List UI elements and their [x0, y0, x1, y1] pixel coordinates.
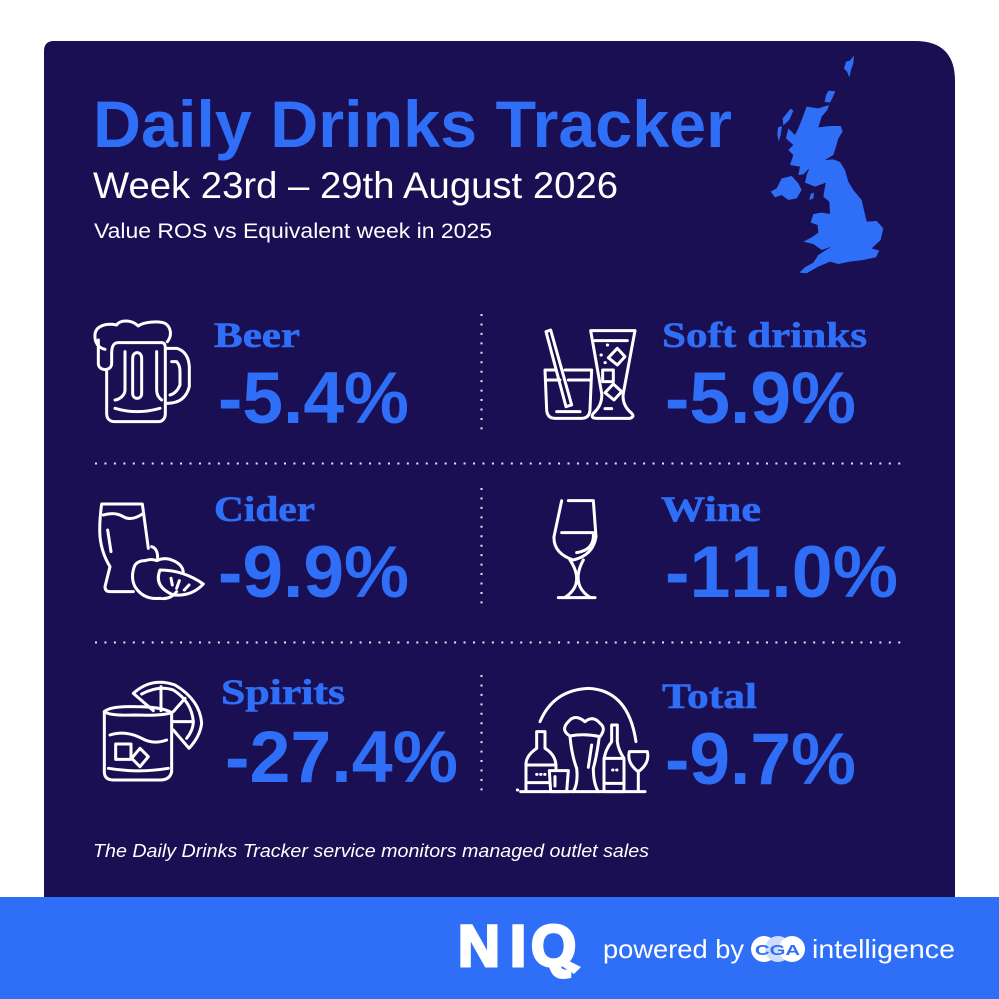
panel: cider [100, 489, 409, 613]
intelligence: intelligence [812, 934, 955, 964]
logo: NIQ [458, 914, 581, 979]
panel: soft drinks [545, 315, 867, 439]
metric description: Value ROS vs Equivalent week in 2025 [94, 220, 492, 243]
label: wine: Wine [661, 489, 761, 529]
divider: vertical row 1 [480, 314, 482, 434]
icon: wine glass [554, 501, 596, 598]
UK map [771, 55, 883, 273]
value: wine: -11.0% [665, 532, 898, 613]
panel: beer [95, 315, 409, 439]
logo: NIQ: I [510, 914, 526, 979]
logo: CGA: CGA [755, 942, 800, 959]
logo: CGA [751, 936, 805, 962]
label: cider: Cider [214, 489, 315, 529]
logo: NIQ: Q [531, 914, 576, 979]
subtitle: Week 23rd – 29th August 2026 [93, 165, 618, 206]
powered by: powered by [603, 934, 744, 964]
footnote: The Daily Drinks Tracker service monitors managed outlet sales [93, 841, 649, 861]
label: soft drinks: Soft drinks [662, 315, 867, 355]
footer band [0, 897, 999, 999]
icon: beer mug [95, 321, 189, 422]
panel: spirits [104, 672, 458, 798]
divider: horizontal 1 [95, 462, 901, 464]
icon: assorted drinks [517, 688, 648, 792]
panel: wine [554, 489, 898, 613]
title: Daily Drinks Tracker [93, 87, 732, 161]
navy panel [44, 41, 955, 897]
value: spirits: -27.4% [225, 717, 458, 798]
icon: tumbler with citrus [104, 682, 202, 780]
divider: vertical row 3 [480, 675, 482, 796]
value: beer: -5.4% [218, 358, 409, 439]
value: soft drinks: -5.9% [665, 358, 856, 439]
divider: vertical row 2 [480, 488, 482, 608]
value: total: -9.7% [665, 719, 856, 800]
divider: horizontal 2 [95, 642, 901, 644]
logo: NIQ: N [458, 914, 500, 979]
icon: cider glass with apple [100, 504, 203, 599]
icon: glasses [545, 330, 635, 418]
value: cider: -9.9% [218, 532, 409, 613]
label: beer: Beer [214, 315, 300, 355]
panel: total [517, 676, 856, 800]
label: total: Total [662, 676, 757, 716]
label: spirits: Spirits [221, 672, 345, 712]
